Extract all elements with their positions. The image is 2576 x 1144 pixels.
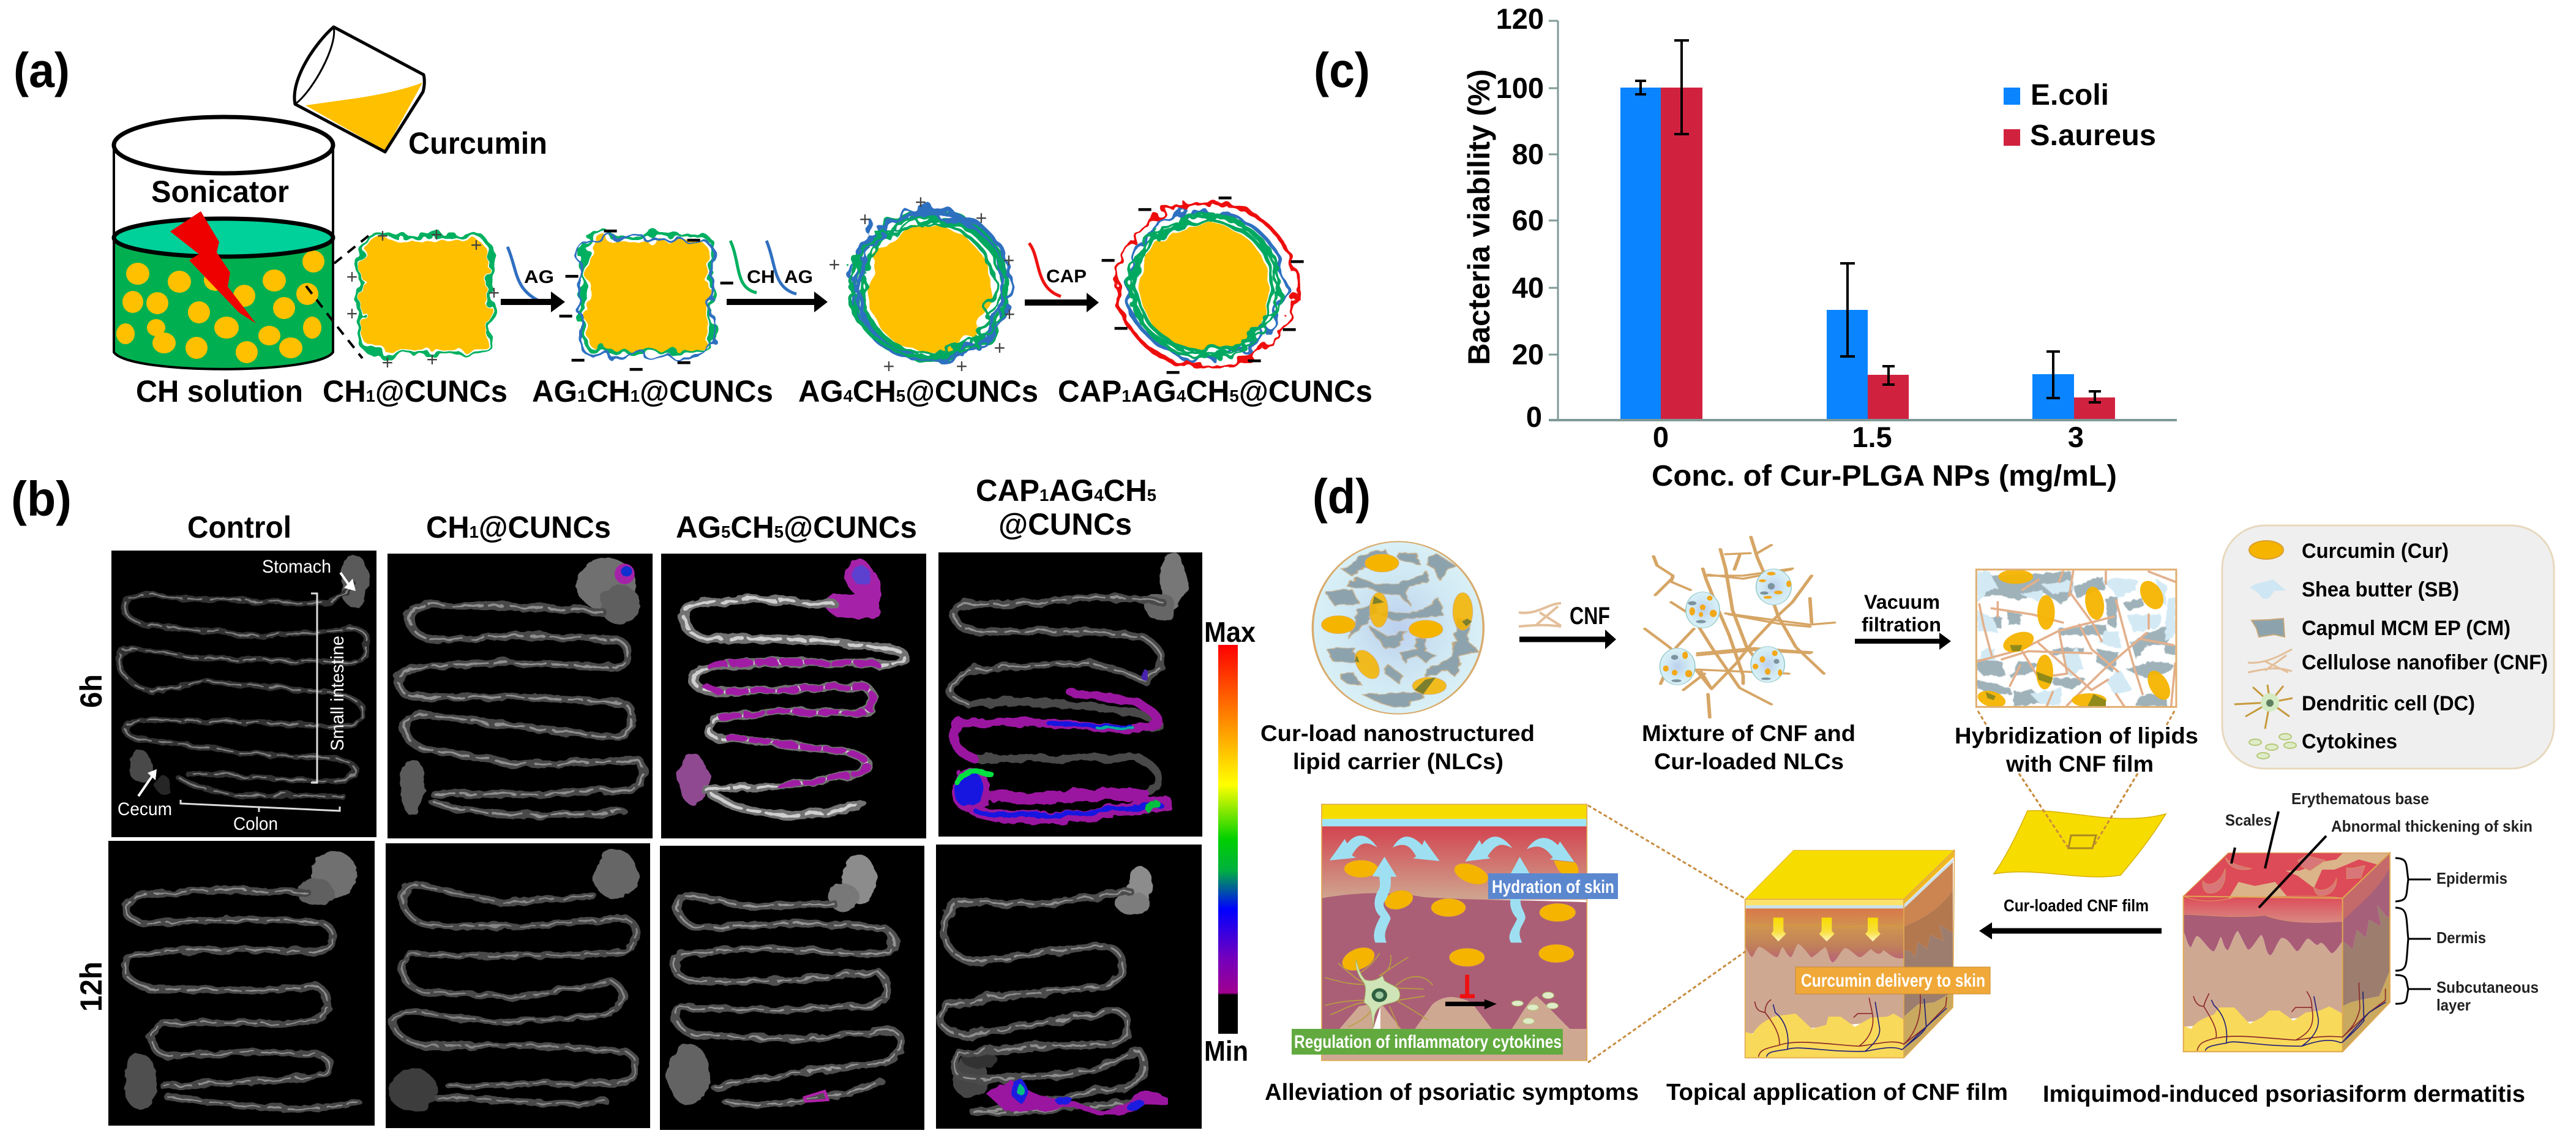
arrow: vacuum filtration: filtration <box>1862 614 1941 636</box>
y tick labels <box>1496 2 1544 433</box>
particle: AG1CH1@CUNCs: − <box>558 301 573 330</box>
pointer lines and labels: skin features: Epidermis <box>2436 869 2507 887</box>
particle: AG1CH1@CUNCs: − <box>719 268 734 297</box>
y tick labels: 40 <box>1512 271 1544 304</box>
pointer lines and labels: skin features <box>2225 789 2539 1014</box>
panel b: fluorescence images of the GI tract <box>74 473 1202 1130</box>
legend text: Dendritic cell (DC) <box>2302 692 2475 715</box>
legend: S.aureus <box>2030 119 2156 152</box>
label: Regulation of inflammatory cytokines: Regulation of inflammatory cytokines <box>1294 1032 1562 1052</box>
arrow: CAP step: CAP <box>1046 266 1087 287</box>
label: Regulation of inflammatory cytokines <box>1292 1029 1563 1055</box>
x tick labels: 1.5 <box>1852 421 1892 453</box>
icon: cytokines <box>2249 734 2296 759</box>
legend <box>2004 79 2156 152</box>
label: Curcumin: Curcumin <box>408 126 547 160</box>
particle: AG1CH1@CUNCs: − <box>676 348 691 377</box>
labels: d top row: Cur-load nanostructured <box>1260 721 1535 746</box>
y tick labels: 20 <box>1512 338 1544 371</box>
column headings: Control <box>187 510 291 544</box>
y tick labels: 60 <box>1512 204 1544 236</box>
labels: d bottom captions: Imiquimod-induced psoriasiform dermatitis <box>2043 1082 2525 1107</box>
panel label: (d): (d) <box>1312 469 1371 524</box>
control annotations: Colon <box>233 814 278 834</box>
particle: CH1@CUNCs: + <box>489 282 500 304</box>
labels: d top row: Cur-loaded NLCs <box>1654 749 1844 774</box>
intestines, CAP 12h <box>940 867 1166 1116</box>
icon: curcumin loaded film <box>1994 773 2166 877</box>
pointer lines and labels: skin features: Erythematous base <box>2291 789 2429 808</box>
control annotations: Small intestine <box>328 636 348 751</box>
colour scale bar <box>1204 616 1256 1067</box>
legend text: Curcumin (Cur) <box>2302 540 2449 563</box>
particle: CH1@CUNCs: + <box>346 303 358 325</box>
particle: CAP1AG4CH5@CUNCs <box>1101 183 1305 386</box>
y axis title: Bacteria viability (%) <box>1462 69 1496 365</box>
legend panel <box>2222 525 2554 769</box>
panel label: (b): (b) <box>11 472 72 526</box>
x tick labels <box>1653 421 2084 453</box>
column headings <box>187 473 1156 544</box>
image panels background <box>108 551 1202 1130</box>
arrow: CAP step <box>1025 243 1099 312</box>
labels: d top row: lipid carrier (NLCs) <box>1293 749 1503 774</box>
column headings: CH1@CUNCs <box>426 510 611 544</box>
legend text: Cytokines <box>2302 730 2397 753</box>
skin cross section detail <box>1322 804 1587 1061</box>
colour scale bar: Min <box>1204 1035 1248 1067</box>
particle: AG1CH1@CUNCs: − <box>564 262 579 290</box>
arrow: CH AG step: AG <box>784 267 813 287</box>
icon: sonicator beaker with CH solution <box>114 117 369 369</box>
legend text: Cellulose nanofiber (CNF) <box>2302 651 2548 674</box>
inhibited arrow <box>1445 975 1497 1009</box>
dendritic cell <box>1325 954 1432 1028</box>
particle: CAP1AG4CH5@CUNCs: − <box>1247 346 1262 375</box>
cytokines <box>1512 992 1558 1024</box>
control annotations: Cecum <box>118 799 172 819</box>
pointer lines and labels: skin features: Subcutaneous <box>2436 978 2539 996</box>
particle: CH1@CUNCs: + <box>471 234 482 256</box>
panel label: (c): (c) <box>1314 43 1370 97</box>
panel c: bar chart of bacteria viability <box>1462 2 2177 492</box>
label: Sonicator: Sonicator <box>151 175 289 209</box>
particle: CH1@CUNCs: + <box>427 348 438 371</box>
labels: d top row: Mixture of CNF and <box>1642 721 1855 746</box>
particle: CAP1AG4CH5@CUNCs: − <box>1282 315 1297 344</box>
particle: AG4CH5@CUNCs <box>829 191 1015 377</box>
intestines, 12h control, CH, AG <box>124 849 902 1111</box>
particle: CH1@CUNCs <box>346 224 500 374</box>
particle: CAP1AG4CH5@CUNCs: − <box>1101 246 1115 274</box>
colour scale bar: Max <box>1204 616 1256 648</box>
labels: particle names: AG1CH1@CUNCs <box>532 374 773 408</box>
control annotations: Stomach <box>262 557 331 577</box>
particle: AG1CH1@CUNCs <box>558 216 734 383</box>
labels: particle names <box>136 374 1372 408</box>
column headings: CAP1AG4CH5 <box>976 473 1156 508</box>
icon: dendritic cell <box>2234 685 2293 729</box>
row labels: 6h <box>74 674 108 708</box>
particle: AG1CH1@CUNCs: − <box>571 345 585 374</box>
axes <box>1549 21 2177 420</box>
labels: d bottom captions: Alleviation of psoriatic symptoms <box>1265 1080 1639 1105</box>
nanostructured lipid carrier <box>1312 541 1483 714</box>
particle: AG4CH5@CUNCs: + <box>994 337 1005 359</box>
particle: CAP1AG4CH5@CUNCs: − <box>1137 195 1152 224</box>
pointer lines and labels: skin features: Dermis <box>2436 928 2486 947</box>
label: Curcumin delivery to skin <box>1795 967 1990 994</box>
icon: cellulose nanofiber <box>2248 649 2292 672</box>
labels: d top row: with CNF film <box>2005 751 2154 777</box>
control annotations <box>118 557 356 834</box>
arrow: CH AG step <box>727 241 828 312</box>
hybrid lipid CNF film <box>1976 570 2176 710</box>
row labels <box>74 674 108 1012</box>
labels: particle names: CH solution <box>136 374 303 408</box>
arrow: AG step: AG <box>524 267 554 287</box>
row labels: 12h <box>74 961 108 1012</box>
x tick labels: 3 <box>2068 421 2084 453</box>
y tick labels: 100 <box>1496 72 1544 104</box>
label: Curcumin delivery to skin: Curcumin delivery to skin <box>1801 971 1985 991</box>
icon: curcumin <box>2249 541 2283 559</box>
particle: CH1@CUNCs: + <box>377 225 388 247</box>
icon: capmul <box>2252 619 2285 637</box>
label: Hydration of skin <box>1488 873 1618 899</box>
panel a: synthesis schematic <box>114 27 1372 408</box>
arrow: AG step <box>501 247 565 312</box>
labels: d top row: Hybridization of lipids <box>1955 723 2198 748</box>
y tick labels: 0 <box>1526 401 1542 433</box>
labels: d bottom captions <box>1265 1080 2525 1107</box>
particle: CAP1AG4CH5@CUNCs: − <box>1114 314 1128 342</box>
arrow: Cur-loaded CNF film <box>1979 896 2162 939</box>
y tick labels: 80 <box>1512 138 1544 170</box>
label: Hydration of skin: Hydration of skin <box>1492 877 1614 897</box>
particle: AG1CH1@CUNCs: − <box>629 355 643 383</box>
icon: shea butter <box>2250 579 2286 599</box>
particle: AG1CH1@CUNCs: − <box>686 225 701 254</box>
mixture of fibres and NLCs <box>1645 537 1835 718</box>
arrow: CH AG step: CH <box>747 267 775 287</box>
arrow: CNF step: CNF <box>1570 603 1610 630</box>
labels: d top row <box>1260 721 2198 777</box>
error bars <box>1635 40 2101 402</box>
panel d: film preparation and treatment <box>1260 525 2554 1107</box>
particle: AG4CH5@CUNCs: + <box>976 207 987 229</box>
labels: d bottom captions: Topical application of CNF film <box>1666 1080 2008 1105</box>
legend text: Shea butter (SB) <box>2302 578 2459 601</box>
legend text: Capmul MCM EP (CM) <box>2302 617 2510 640</box>
particle: AG4CH5@CUNCs: + <box>915 191 926 213</box>
labels: particle names: CH1@CUNCs <box>323 374 507 408</box>
icon: curcumin pouring cup <box>294 27 424 152</box>
pointer lines and labels: skin features: layer <box>2436 996 2471 1014</box>
particle: CAP1AG4CH5@CUNCs: − <box>1290 247 1305 276</box>
arrow: vacuum filtration <box>1855 591 1951 650</box>
skin block: psoriasis model <box>2184 853 2390 1052</box>
particle: AG4CH5@CUNCs: + <box>1003 249 1014 271</box>
arrow: vacuum filtration: Vacuum <box>1864 591 1940 613</box>
legend text <box>2302 540 2548 753</box>
intestines, CAP 6h <box>950 552 1187 818</box>
pointer lines and labels: skin features: Scales <box>2225 811 2272 829</box>
particle: CAP1AG4CH5@CUNCs: − <box>1166 358 1180 386</box>
particle: CH1@CUNCs: + <box>382 352 393 374</box>
particle: AG4CH5@CUNCs: + <box>956 355 967 377</box>
zoom lines: block to detail <box>1588 805 1746 1063</box>
intestines, 6h control, CH, AG <box>119 555 904 816</box>
legend: E.coli <box>2031 79 2109 111</box>
particle: AG4CH5@CUNCs: + <box>883 355 894 377</box>
skin block: with CNF film on top <box>1745 850 1955 1058</box>
zoom lines: hybrid box to film <box>1978 711 2174 848</box>
particle: CH1@CUNCs: + <box>431 224 442 246</box>
particle: AG4CH5@CUNCs: + <box>829 254 840 276</box>
x tick labels: 0 <box>1653 421 1669 453</box>
particle: CH1@CUNCs: + <box>346 266 358 288</box>
x axis title: Conc. of Cur-PLGA NPs (mg/mL) <box>1652 460 2117 492</box>
labels: particle names: CAP1AG4CH5@CUNCs <box>1058 374 1372 408</box>
column headings: AG5CH5@CUNCs <box>676 510 917 544</box>
labels: particle names: AG4CH5@CUNCs <box>798 374 1038 408</box>
y tick labels: 120 <box>1496 2 1544 35</box>
arrow: CNF step <box>1519 603 1616 649</box>
bars <box>1620 88 2115 419</box>
pointer lines and labels: skin features: Abnormal thickening of skin <box>2331 817 2533 835</box>
arrow: Cur-loaded CNF film: Cur-loaded CNF film <box>2004 896 2149 915</box>
particle: AG4CH5@CUNCs: + <box>859 208 871 230</box>
column headings: @CUNCs <box>998 507 1132 541</box>
panel label: (a): (a) <box>13 43 70 97</box>
particle: AG1CH1@CUNCs: − <box>603 216 618 245</box>
magenta stomach highlight, CH <box>615 563 635 584</box>
particle: CAP1AG4CH5@CUNCs: − <box>1218 183 1232 212</box>
particle: AG4CH5@CUNCs: + <box>1004 303 1015 325</box>
